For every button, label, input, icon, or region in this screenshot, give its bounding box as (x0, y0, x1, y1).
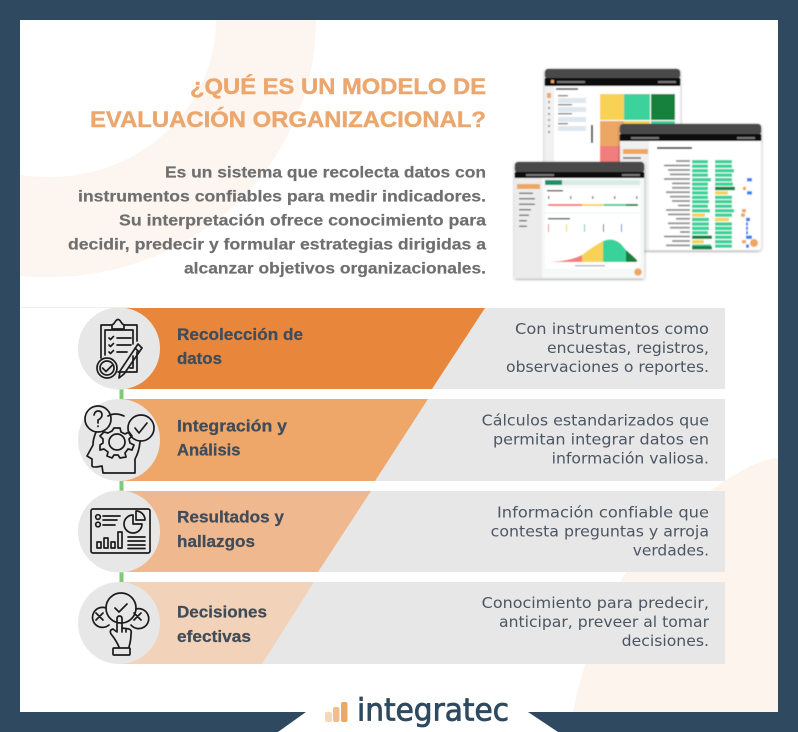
row 3: resultados y hallazgos: hallazgos (177, 533, 255, 551)
label: Integración y (177, 418, 288, 436)
gray band (120, 491, 725, 572)
thin divider at top of rows (20, 307, 130, 308)
logo: integratec (325, 693, 509, 729)
title: ¿QUÉ ES UN MODELO DE (190, 74, 486, 99)
icon circle (78, 399, 160, 481)
row 3: resultados y hallazgos (78, 490, 725, 572)
row 1: recolección de datos: observaciones o reportes. (506, 358, 709, 376)
wordmark: integratec (357, 693, 509, 729)
gray band (120, 582, 725, 664)
intro paragraph (68, 164, 486, 277)
icon circle (78, 490, 160, 572)
icon circle (78, 308, 160, 390)
screenshot: results bars window (620, 124, 761, 250)
icon: clipboard (97, 320, 142, 378)
row 2: integración y análisis: Análisis (177, 442, 240, 460)
intro paragraph: Su interpretación ofrece conocimiento para (119, 212, 486, 229)
description: Con instrumentos como (515, 320, 709, 338)
icon: head with gear (85, 406, 154, 473)
icon: logo bars (325, 702, 348, 722)
row 4: decisiones efectivas: anticipar, preveer al tomar (499, 613, 710, 631)
intro paragraph: decidir, predecir y formular estrategias dirigidas a (68, 236, 486, 253)
decorative peach ring top left (20, 20, 316, 277)
title (90, 74, 486, 132)
screenshot: heatmap window (545, 69, 680, 169)
row 4: decisiones efectivas: decisiones. (622, 632, 709, 650)
row 2: integración y análisis (78, 399, 725, 481)
label: Resultados y (177, 509, 285, 527)
gray band (120, 399, 725, 481)
orange band (120, 399, 428, 481)
row 4: decisiones efectivas: efectivas (177, 628, 251, 646)
orange band (120, 308, 485, 389)
description: Información confiable que (497, 503, 709, 521)
icon: dashboard (91, 509, 150, 553)
icon circle (78, 582, 160, 664)
description: Conocimiento para predecir, (482, 594, 709, 612)
row 2: integración y análisis: información valiosa. (552, 449, 709, 467)
orange band (120, 491, 371, 572)
row 1: recolección de datos: datos (177, 350, 222, 368)
row 1: recolección de datos: encuestas, registros, (547, 339, 709, 357)
row 4: decisiones efectivas (78, 582, 725, 664)
gray band (120, 308, 725, 389)
screenshot: bell curve window (515, 162, 644, 278)
description: Cálculos estandarizados que (482, 412, 709, 430)
row 3: resultados y hallazgos: verdades. (633, 542, 709, 560)
row 2: integración y análisis: permitan integrar datos en (493, 430, 709, 448)
icon: hand pressing check (93, 593, 149, 655)
title: EVALUACIÓN ORGANIZACIONAL? (90, 107, 486, 132)
intro paragraph: Es un sistema que recolecta datos con (165, 164, 486, 181)
decorative peach shape bottom right (573, 458, 778, 712)
software screenshots (515, 69, 761, 278)
row 3: resultados y hallazgos: contesta preguntas y arroja (491, 523, 709, 541)
row 1: recolección de datos (78, 308, 725, 390)
label: Decisiones (177, 604, 267, 622)
connector: green timeline (120, 385, 124, 585)
orange band (120, 582, 314, 664)
intro paragraph: alcanzar objetivos organizacionales. (184, 260, 486, 277)
label: Recolección de (177, 326, 303, 344)
intro paragraph: instrumentos confiables para medir indicadores. (78, 188, 486, 205)
